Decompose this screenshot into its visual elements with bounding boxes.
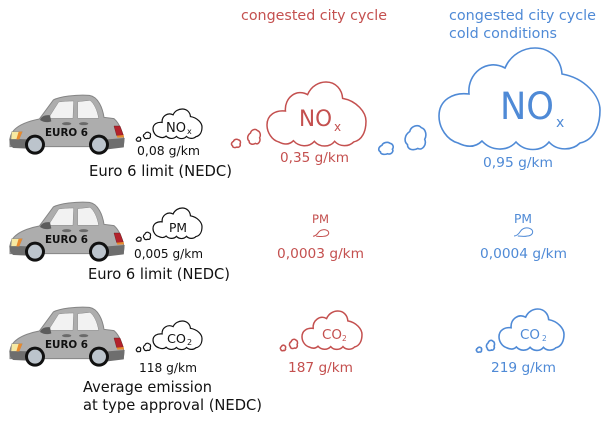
- row 3: average emission label: Average emission: [83, 379, 212, 396]
- row 2: PM limit cloud: [136, 208, 202, 241]
- column heading: congested city cycle cold conditions: [449, 8, 596, 42]
- row 3: average emission label: [83, 379, 262, 414]
- row 2: red PM label and particle: PM: [312, 212, 329, 226]
- row 2: Euro 6 limit label: Euro 6 limit (NEDC): [88, 266, 230, 283]
- row 3: red CO2 cloud: [280, 311, 362, 351]
- row 3: CO2 cloud: [136, 321, 202, 352]
- row 2: red PM label and particle: [312, 212, 329, 237]
- row 1: NOx limit cloud: x: [187, 127, 192, 136]
- row 1: red NOx cloud: NO: [299, 107, 332, 132]
- row 1: NOx limit value: 0,08 g/km: [137, 143, 200, 158]
- row 3: blue CO2 cloud: [476, 309, 564, 352]
- row 1: red NOx cloud: [231, 82, 366, 148]
- row 2: PM Euro 6 car: [9, 202, 125, 262]
- row 1: Euro 6 limit label: Euro 6 limit (NEDC): [89, 163, 232, 180]
- row 2: blue PM label and particle: PM: [514, 212, 532, 226]
- row 1: blue NOx value: 0,95 g/km: [483, 155, 553, 171]
- row 3: red CO2 value: 187 g/km: [288, 360, 353, 376]
- row 1: NOx Euro 6 car: [9, 95, 125, 155]
- row 3: blue CO2 value: 219 g/km: [491, 360, 556, 376]
- row 3: CO2 cloud: 2: [187, 338, 192, 347]
- row 3: blue CO2 cloud: 2: [542, 334, 547, 343]
- row 2: PM Euro 6 car: EURO 6: [45, 234, 88, 246]
- row 1: NOx limit cloud: NO: [166, 121, 186, 136]
- row 3: CO2 value: 118 g/km: [139, 361, 197, 375]
- column heading: congested city cycle: congested city cycle: [241, 8, 387, 24]
- row 1: red NOx cloud: x: [334, 120, 341, 134]
- row 1: NOx limit cloud: [136, 109, 202, 141]
- row 1: blue NOx cloud: NO: [500, 85, 554, 128]
- row 2: blue PM label and particle: [514, 212, 533, 236]
- row 3: blue CO2 cloud: CO: [520, 327, 540, 343]
- row 3: red CO2 cloud: CO: [322, 327, 342, 343]
- row 3: CO2 Euro 6 car: EURO 6: [45, 339, 88, 351]
- row 2: PM limit value: 0,005 g/km: [134, 247, 203, 261]
- row 1: NOx Euro 6 car: EURO 6: [45, 127, 88, 139]
- row 1: red NOx value: 0,35 g/km: [280, 150, 349, 166]
- column heading: congested city cycle cold conditions: congested city cycle: [449, 8, 596, 24]
- row 3: red CO2 cloud: 2: [342, 334, 347, 343]
- row 3: CO2 cloud: CO: [167, 332, 186, 347]
- row 1: blue NOx cloud: x: [556, 115, 564, 131]
- row 2: red PM value: 0,0003 g/km: [277, 246, 364, 262]
- row 2: PM limit cloud: PM: [169, 221, 187, 235]
- row 3: CO2 Euro 6 car: [9, 307, 125, 367]
- row 3: average emission label: at type approval (NEDC): [83, 397, 262, 414]
- column heading: congested city cycle cold conditions: cold conditions: [449, 26, 557, 42]
- row 2: blue PM value: 0,0004 g/km: [480, 246, 567, 262]
- row 1: blue NOx cloud: [379, 48, 600, 154]
